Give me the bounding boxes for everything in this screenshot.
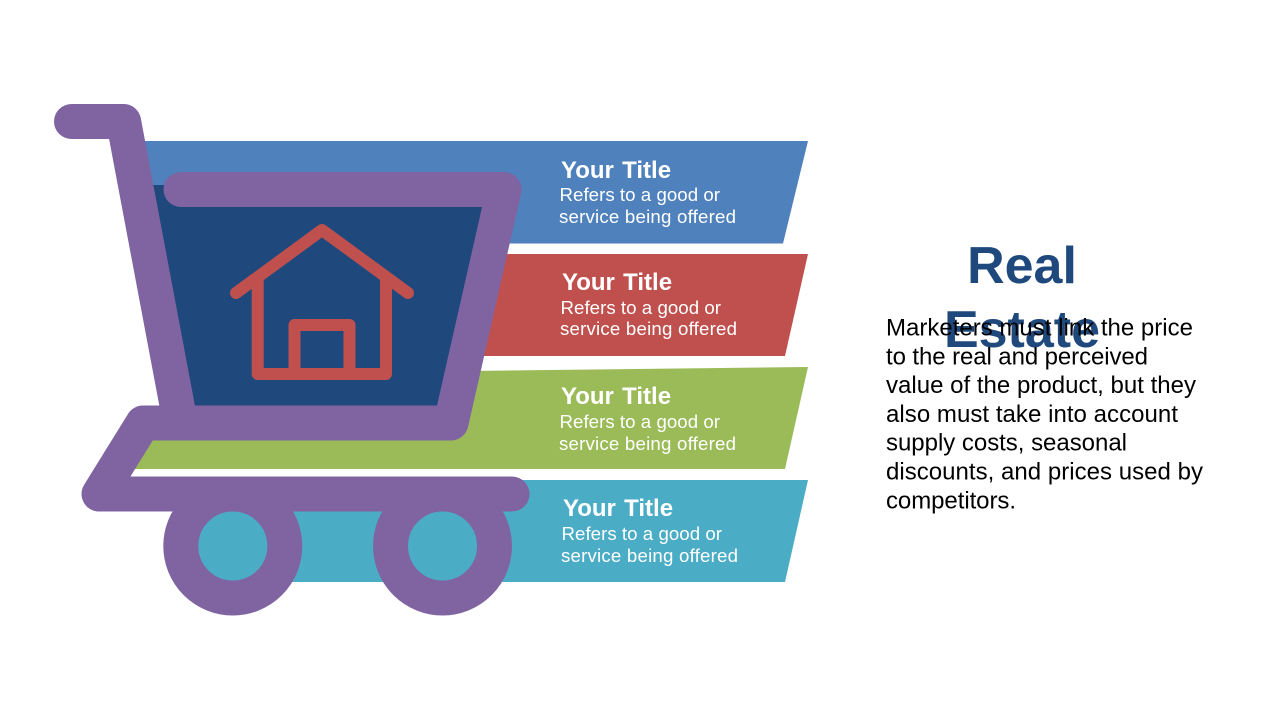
text: blue band copy bbox=[559, 157, 736, 227]
cart frame bbox=[72, 122, 512, 494]
cart left wheel bbox=[181, 494, 285, 598]
text block: description: Marketers must link the price bbox=[886, 314, 1193, 342]
text: red band copy: Your Title bbox=[562, 269, 672, 296]
text block: description: competitors. bbox=[886, 487, 1016, 514]
panel: red band bbox=[450, 254, 808, 356]
text block: description: value of the product, but they bbox=[886, 372, 1196, 399]
text: teal band copy bbox=[561, 495, 738, 566]
heading: Real Estate: Estate bbox=[944, 301, 1100, 359]
text: blue band copy: Refers to a good or bbox=[560, 184, 720, 205]
text: teal band copy: Refers to a good or bbox=[562, 523, 722, 544]
text block: description: discounts, and prices used by bbox=[886, 458, 1203, 486]
panel: green band bbox=[134, 367, 808, 469]
cart right wheel bbox=[390, 494, 494, 598]
text: blue band copy: Your Title bbox=[561, 157, 671, 184]
text block: description: supply costs, seasonal bbox=[886, 430, 1127, 457]
text: red band copy bbox=[560, 269, 737, 339]
text block: description: also must take into account bbox=[886, 401, 1178, 428]
text: blue band copy: service being offered bbox=[559, 206, 736, 227]
text: green band copy bbox=[559, 383, 736, 454]
text: green band copy: Your Title bbox=[561, 383, 671, 410]
text: green band copy: Refers to a good or bbox=[560, 411, 720, 432]
text block: description: to the real and perceived bbox=[886, 343, 1148, 370]
shopping cart basket fill bbox=[152, 185, 500, 410]
text: green band copy: service being offered bbox=[559, 433, 736, 454]
text: red band copy: Refers to a good or bbox=[560, 297, 721, 318]
text block: description bbox=[886, 314, 1203, 514]
text: teal band copy: service being offered bbox=[561, 545, 738, 566]
icon: shopping cart bbox=[72, 122, 512, 598]
text: teal band copy: Your Title bbox=[563, 495, 673, 522]
panel: blue band bbox=[128, 141, 808, 244]
panel: teal band bbox=[240, 480, 808, 582]
heading: Real Estate bbox=[944, 237, 1100, 359]
heading: Real Estate: Real bbox=[967, 237, 1077, 295]
icon: house bbox=[236, 230, 408, 374]
text: red band copy: service being offered bbox=[560, 318, 737, 339]
